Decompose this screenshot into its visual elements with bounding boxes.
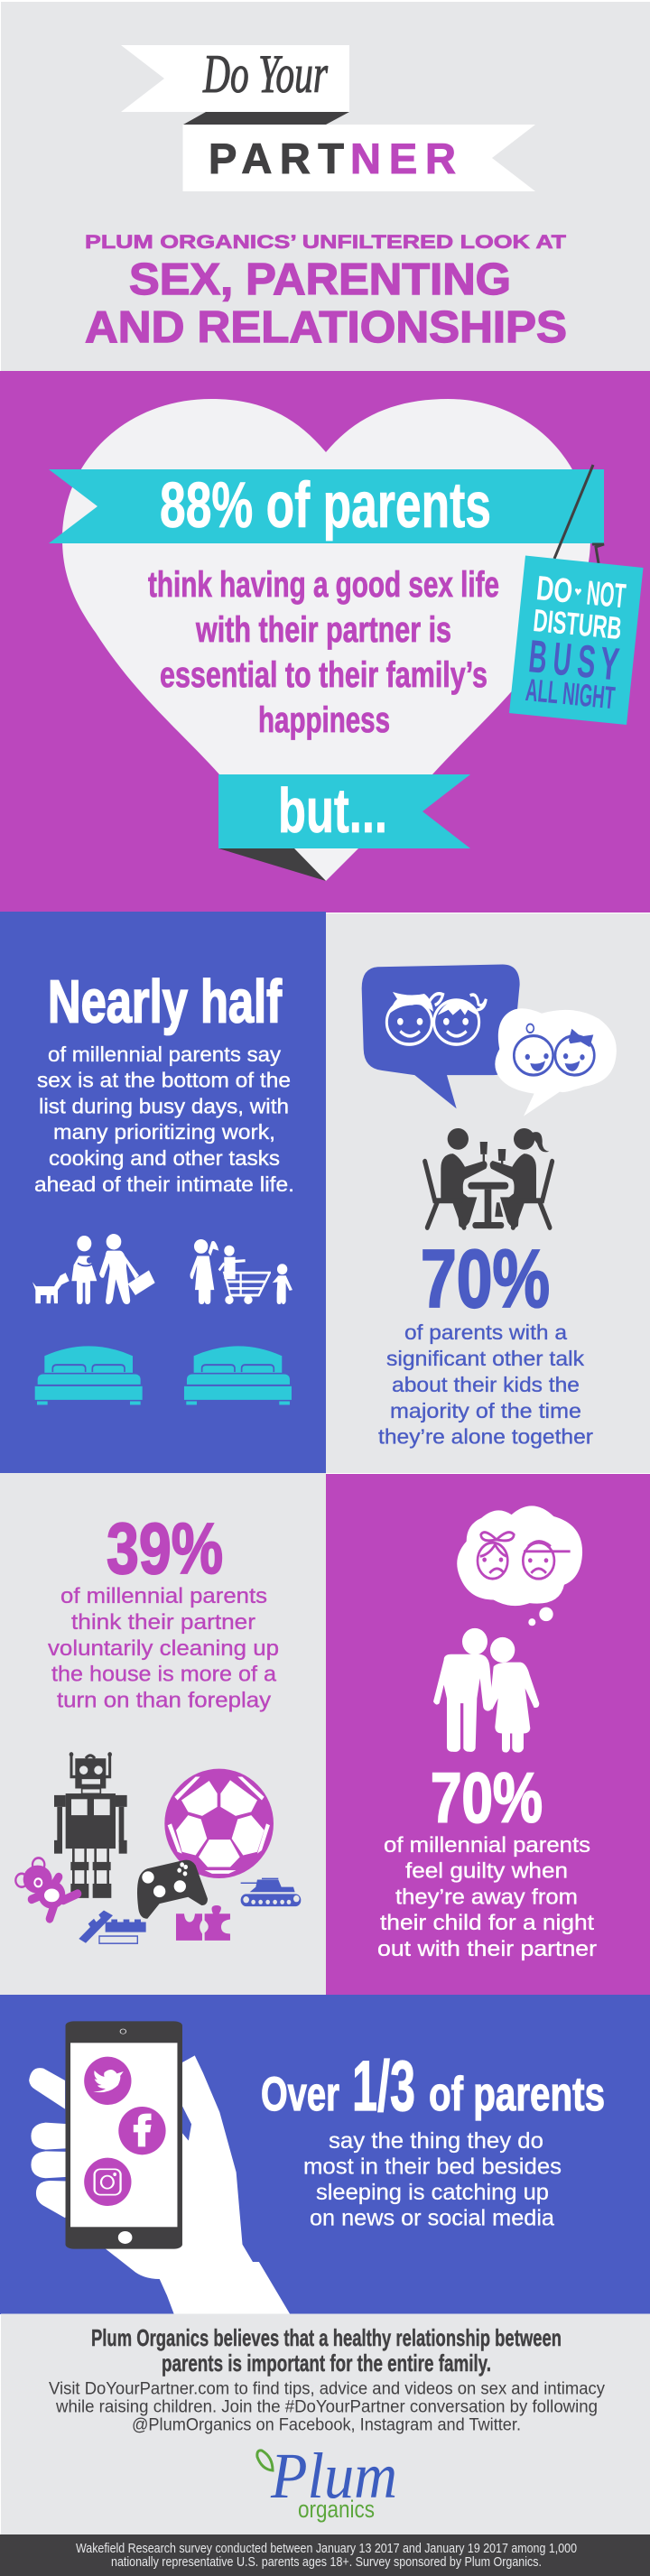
text: think having a good sex life: happiness — [258, 700, 390, 740]
icon: couple holding hands — [433, 1628, 539, 1753]
title: SEX, PARENTING — [129, 255, 511, 304]
text: survey note — [76, 2541, 577, 2570]
text: think having a good sex life: essential to their family’s — [160, 655, 488, 695]
text: think having a good sex life: think having a good sex life — [148, 565, 499, 605]
text: cleaning vs foreplay — [48, 1584, 279, 1713]
panel: nearly half — [0, 912, 326, 1473]
icon: puzzle — [176, 1905, 230, 1941]
text: millennial parents say: of millennial parents say — [48, 1042, 282, 1066]
fold shadow — [218, 848, 326, 881]
text: cleaning vs foreplay: voluntarily cleaning up — [48, 1636, 279, 1661]
text: millennial parents say: list during busy days, with — [39, 1094, 289, 1117]
text: feel guilty: feel guilty when — [405, 1859, 568, 1883]
icon: bed right — [184, 1346, 292, 1404]
icon: blue speech bubble with kids — [362, 965, 520, 1108]
panel: 88% of parents — [0, 371, 650, 913]
text: bed and social media: most in their bed besides — [303, 2154, 562, 2179]
icon: couple at table — [425, 1128, 552, 1228]
logo: Plum Organics: organics — [298, 2496, 375, 2523]
icon: bed left — [35, 1346, 143, 1404]
text: parents talk about kids: of parents with a — [404, 1320, 567, 1344]
icon: thought cloud with sad kids — [457, 1506, 582, 1626]
text: bed and social media: sleeping is catching up — [316, 2180, 549, 2205]
icon: door hanger sign: U — [551, 633, 574, 685]
text: millennial parents say: sex is at the bottom of the — [37, 1069, 291, 1092]
title: AND RELATIONSHIPS — [85, 303, 567, 352]
heart — [62, 399, 590, 881]
ribbon: but — [218, 774, 470, 848]
ribbon: Partner: PART — [209, 134, 344, 182]
text: visit site: while raising children. Join the #DoYourPartner conversation by following — [55, 2397, 598, 2417]
panel: header — [1, 2, 650, 372]
text: cleaning vs foreplay: think their partner — [71, 1610, 255, 1635]
logo: Plum Organics: Plum — [270, 2440, 397, 2512]
heading: Over 1/3 of parents — [261, 2045, 605, 2126]
text: parents talk about kids — [378, 1320, 593, 1448]
heading: Over 1/3 of parents: Over — [261, 2068, 339, 2121]
icon: door hanger sign: DO — [534, 570, 574, 611]
text: feel guilty: of millennial parents — [384, 1833, 590, 1858]
ribbon: Do Your — [121, 44, 349, 112]
subtitle: PLUM ORGANICS’ UNFILTERED LOOK AT — [85, 231, 566, 253]
text: millennial parents say: cooking and other tasks — [49, 1146, 280, 1170]
stat: 70%: 70% — [421, 1234, 550, 1325]
panel: 70% talk about kids — [326, 913, 650, 1473]
text: healthy relationship headline — [91, 2324, 562, 2377]
heading: Over 1/3 of parents: 1/3 — [352, 2045, 415, 2126]
text: parents talk about kids: about their kids the — [392, 1373, 580, 1396]
icon: dog, mother with baby, father with briefcase — [32, 1234, 155, 1304]
text: parents talk about kids: significant other talk — [386, 1347, 585, 1370]
icon: game controller — [137, 1860, 208, 1919]
icon: door hanger sign — [509, 465, 643, 725]
text: parents talk about kids: they’re alone together — [378, 1424, 593, 1448]
icon: door hanger sign: B — [526, 630, 550, 683]
text: think having a good sex life: with their partner is — [195, 610, 451, 650]
icon: twitter — [84, 2057, 132, 2105]
text: cleaning vs foreplay: the house is more of a — [51, 1663, 277, 1686]
icon: door hanger sign: S — [575, 635, 598, 688]
text: bed and social media: say the thing they do — [329, 2128, 543, 2154]
icon: soccer ball — [164, 1769, 274, 1878]
text: visit site: Visit DoYourPartner.com to find tips, advice and videos on sex and intimacy — [49, 2379, 605, 2399]
text: millennial parents say: ahead of their intimate life. — [34, 1172, 294, 1196]
text: feel guilty — [377, 1833, 597, 1961]
text: cleaning vs foreplay: turn on than foreplay — [57, 1688, 271, 1713]
icon: hand holding phone — [29, 2021, 290, 2314]
icon: toy tank — [241, 1878, 301, 1906]
text: millennial parents say: many prioritizing work, — [53, 1120, 275, 1144]
panel: 70% feel guilty — [326, 1474, 650, 1996]
icon: door hanger sign: ♥ — [573, 584, 582, 598]
text: survey note: nationally representative U.S. parents ages 18+. Survey sponsored by Plum Organics. — [111, 2554, 542, 2570]
text: feel guilty: their child for a night — [380, 1911, 594, 1935]
icon: teddy bear — [15, 1858, 78, 1919]
icon: door hanger sign: Y — [598, 637, 621, 690]
text: feel guilty: they’re away from — [395, 1885, 578, 1910]
ribbon fold — [183, 112, 349, 125]
ribbon: Do Your: Do Your — [202, 44, 328, 104]
icon: building blocks — [79, 1911, 146, 1943]
text: healthy relationship headline: parents is important for the entire family. — [162, 2349, 491, 2377]
heading: Nearly half: Nearly half — [48, 968, 283, 1036]
panel: survey source — [0, 2534, 650, 2576]
ribbon: but: but... — [278, 775, 387, 846]
text: millennial parents say — [34, 1042, 294, 1196]
text: bed and social media — [303, 2128, 562, 2231]
title — [85, 255, 567, 352]
ribbon: Partner: NER — [350, 134, 456, 182]
icon: robot — [54, 1752, 127, 1898]
text: visit site: @PlumOrganics on Facebook, Instagram and Twitter. — [132, 2415, 521, 2435]
ribbon: 88% of parents: 88% of parents — [160, 470, 491, 542]
text: bed and social media: on news or social media — [310, 2206, 554, 2231]
ribbon: Partner — [182, 125, 535, 191]
icon: instagram — [84, 2158, 132, 2206]
stat: 70%: 70% — [431, 1758, 543, 1838]
stat: 39%: 39% — [107, 1508, 223, 1589]
icon: facebook — [118, 2107, 166, 2154]
text: think having a good sex life — [148, 565, 499, 740]
text: cleaning vs foreplay: of millennial parents — [60, 1584, 267, 1608]
text: parents talk about kids: majority of the time — [390, 1399, 581, 1422]
icon: mother, child and shopping cart — [190, 1239, 292, 1304]
panel: footer message — [1, 2314, 650, 2534]
icon: white speech cloud with babies — [495, 1008, 617, 1117]
panel: over 1/3 of parents — [0, 1995, 650, 2314]
panel: 39% cleaning — [0, 1473, 326, 1996]
text: feel guilty: out with their partner — [377, 1937, 597, 1961]
text: visit site — [49, 2379, 605, 2435]
